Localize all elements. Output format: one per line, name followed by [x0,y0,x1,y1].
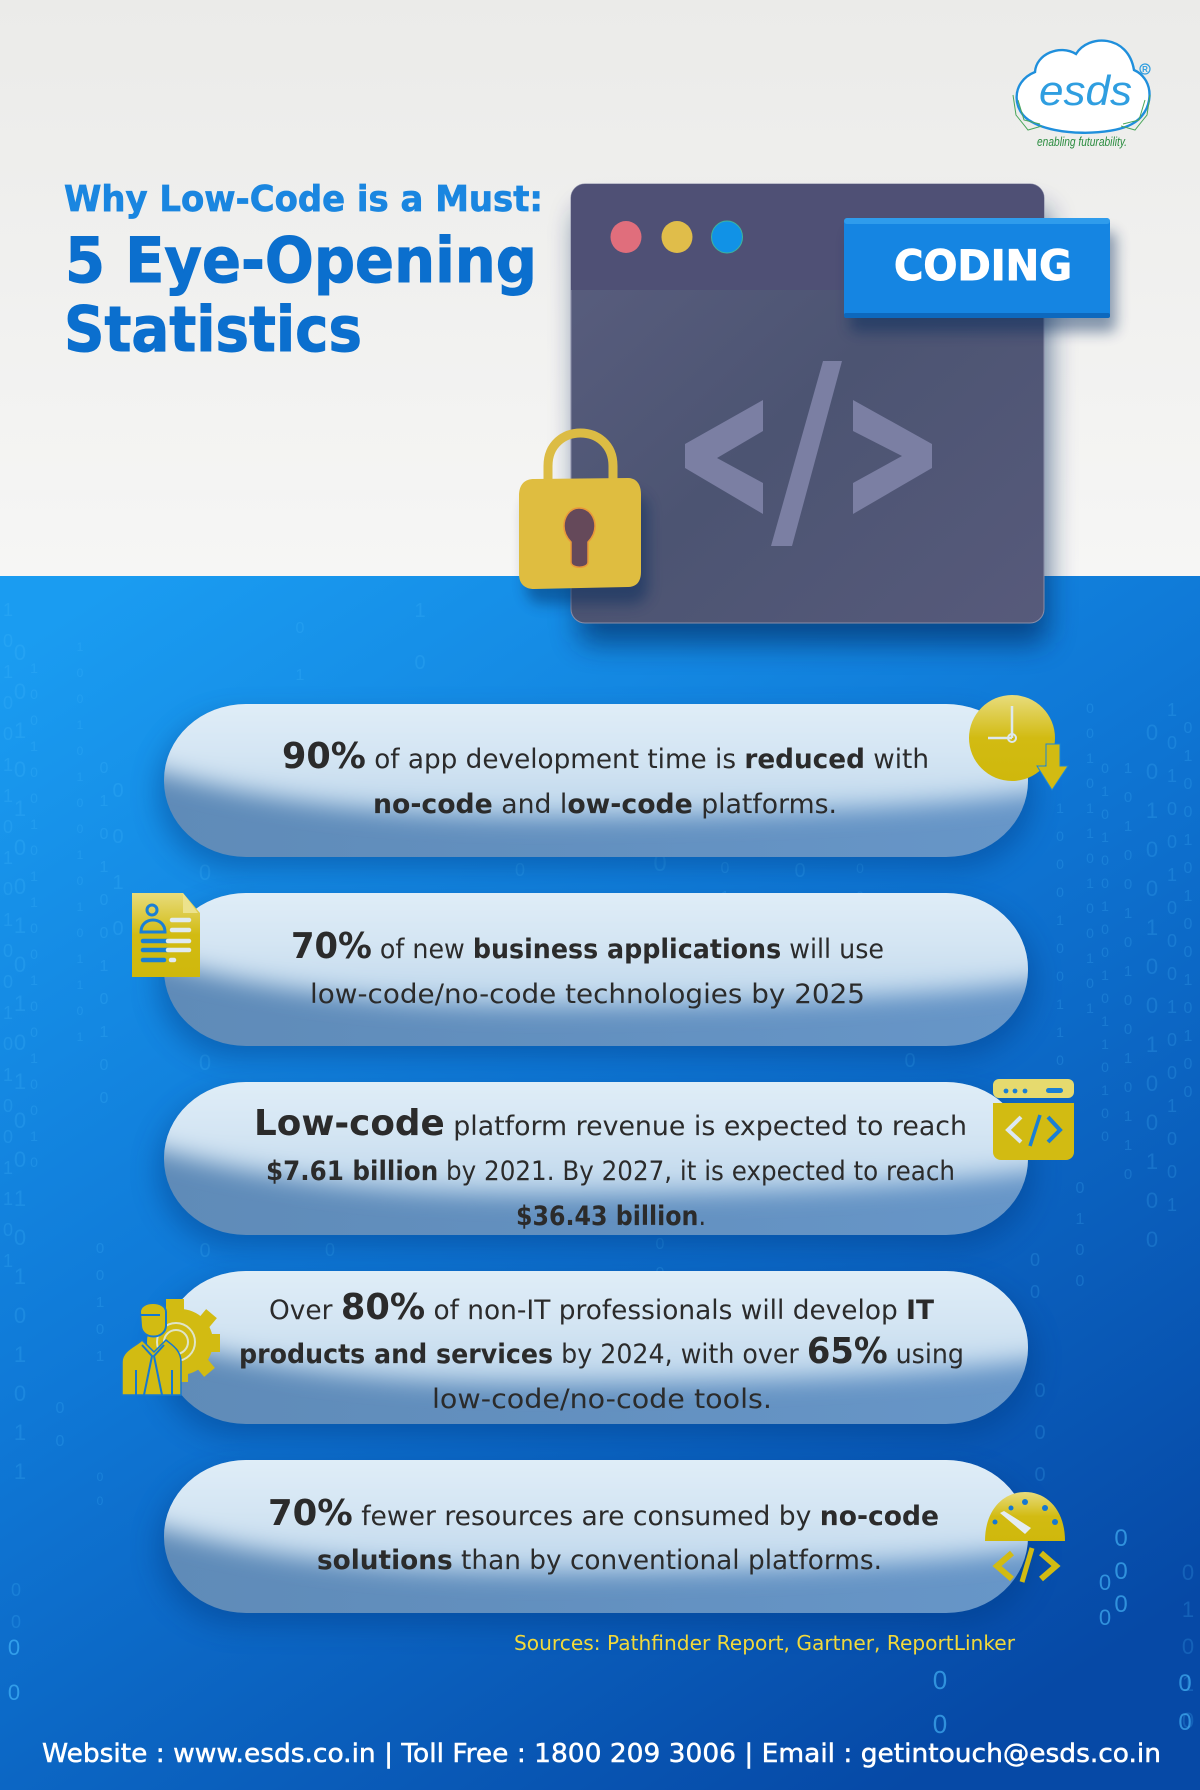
title [64,179,543,366]
logo hands [1013,95,1150,130]
window body [571,184,1044,623]
panel: stat 3 [124,1042,1068,1247]
pill background [124,853,1068,1058]
text: 1000100110 [1052,800,1068,1080]
illustration: code window [519,184,1116,644]
text: 01 [789,860,811,944]
text: 00 [2,1635,26,1725]
text: 10010010110010010010 [26,660,42,1180]
coding badge: CODING [894,241,1072,290]
stat text: Over 80% of non-IT professionals will develop IT [269,1287,935,1328]
stat text [254,1103,967,1232]
text: 01010 [1176,1560,1200,1745]
text: 01010010100 [96,760,112,1123]
text: 000 [1029,1380,1051,1506]
logo: esds cloud [1013,41,1150,149]
window header [571,184,1044,290]
stat text: no-code and low-code platforms. [373,789,837,820]
icon: browser code window [993,1079,1074,1160]
text: 101001010010110 [1120,760,1136,1195]
panel: stat 5 [124,1420,1068,1625]
panel: stat 2 [124,853,1068,1058]
stat text: 70% fewer resources are consumed by no-code [268,1493,939,1534]
logo cloud [1017,41,1150,133]
text: 010 [510,860,530,980]
text: 010 [320,1240,340,1342]
stat text [268,1493,939,1576]
stat text: 70% of new business applications will use [291,926,884,967]
icon: professional with gear [122,1299,220,1395]
text: 0010100101010010101011 [8,640,32,1498]
text: 0000 [192,860,218,1040]
background: blue lower band [0,576,1200,1790]
logo tagline: enabling futurability. [1037,134,1127,149]
icon: speed gauge with code [985,1492,1065,1582]
text: 0101 [716,860,734,976]
text: 00100100100100 [1140,720,1164,1266]
text: 00 [1025,1250,1045,1314]
logo wordmark: esds [1039,67,1132,114]
text: 0010 [652,1236,668,1352]
pill background [124,1420,1068,1625]
background: light top band [0,0,1200,577]
text: 000 [1108,1525,1134,1624]
icon: padlock [519,433,648,604]
panel: stat 1 [124,664,1068,869]
text: 01010010010110100 [1097,760,1113,1151]
text: 1001010010101101 [73,640,87,1056]
text: 0010 [852,860,868,972]
stat text [291,926,884,1010]
stat text: 90% of app development time is reduced with [282,736,929,777]
panel: stat 4 [124,1231,1068,1436]
stat text: products and services by 2024, with over 65% using [239,1331,964,1372]
stat text: low-code/no-code technologies by 2025 [310,979,865,1010]
text: 01001010010100 [1180,720,1196,1112]
coding badge [844,218,1116,332]
window shadow [578,208,1048,644]
text: 00 [925,1665,955,1753]
text: 00 [646,850,674,944]
pill background [124,664,1068,869]
text: 00 [93,1470,107,1518]
logo registered mark: R [1142,65,1148,74]
code symbol [685,361,932,546]
text: 00 [899,1050,921,1138]
text: 1010010001001001 [1162,700,1182,1228]
text: 00 [52,1400,68,1466]
text: 0010 [107,780,129,964]
stat text: $7.61 billion by 2021. By 2027, it is expected to reach [266,1156,955,1187]
footer contact line: Website : www.esds.co.in | Toll Free : 1800 209 3006 | Email : getintouch@esds.co.in [42,1739,1161,1769]
text: 00 [1172,1670,1198,1748]
stat text: $36.43 billion. [516,1201,706,1232]
text: 01 [292,620,308,714]
pill background [124,1231,1068,1436]
window dots [610,221,742,253]
stat text: low-code/no-code tools. [432,1384,772,1415]
title line 1: Why Low-Code is a Must: [64,179,543,220]
text: 0010110100101 [1082,700,1098,1025]
text: 0100 [1072,1180,1088,1304]
stat text [239,1287,964,1415]
text: 00 [194,1240,216,1324]
icon: document with person [132,893,200,977]
text: 00 [6,1580,26,1644]
text: 00101 [92,1240,108,1375]
text: 0000 [192,1050,218,1246]
title line 3: Statistics [64,293,362,366]
title line 2: 5 Eye-Opening [65,224,537,297]
stat text: solutions than by conventional platforms. [317,1545,882,1576]
sources note: Sources: Pathfinder Report, Gartner, ReportLinker [514,1631,1016,1655]
pill background [124,1042,1068,1247]
icon: clock with down arrow [969,695,1068,790]
text: 00 [1092,1570,1118,1640]
stat text [282,736,929,820]
text: 10 [409,600,431,704]
stat text: Low-code platform revenue is expected to reach [254,1103,967,1144]
